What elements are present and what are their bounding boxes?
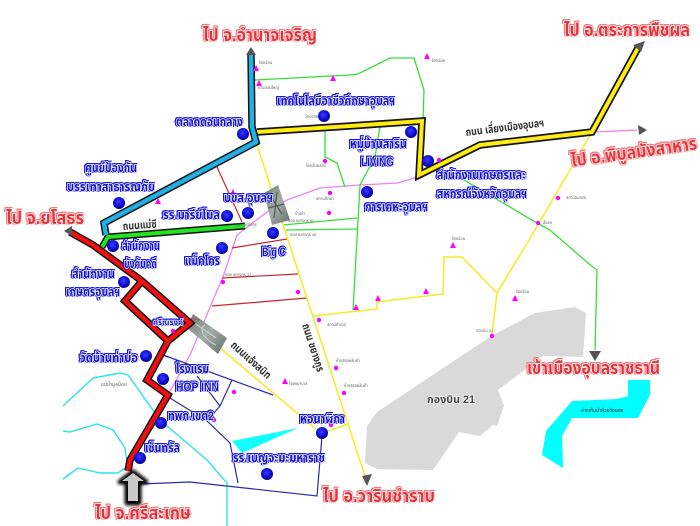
airbase area xyxy=(365,307,586,470)
red direction labels: ไป จ.ยโสธร xyxy=(6,208,84,228)
small place names: โรงพยาบาล xyxy=(289,381,307,386)
blue place labels: สำนักงาน xyxy=(122,239,160,253)
navy roads xyxy=(140,355,322,496)
blue place labels: เกษตรอุบลฯ xyxy=(66,285,120,299)
small place names: ซอย ชยางกูร xyxy=(236,222,257,227)
blue place labels: Big C xyxy=(262,245,286,259)
magenta triangle markers xyxy=(155,53,518,384)
blue place labels: หมู่บ้านสาริน xyxy=(350,137,407,152)
small place names: วิทยาลัย xyxy=(304,114,319,119)
black road names: ถนนแจ้งสนิท xyxy=(228,339,274,382)
black road names xyxy=(122,114,545,382)
small place names: ร้านค้า xyxy=(295,211,305,216)
blue place labels: สำนักงาน xyxy=(72,267,115,281)
arrow: start north from Sisaket xyxy=(120,472,146,503)
blue place labels: การเคหะอุบลฯ xyxy=(365,200,428,214)
red side roads xyxy=(212,167,307,306)
blue place labels: สำนักงานเกษตรและ xyxy=(437,168,526,182)
airbase label: กองบิน 21 xyxy=(427,394,475,406)
route: yellow bypass xyxy=(257,48,638,175)
small place names: กองบิน 21 xyxy=(476,328,494,333)
small place names: โรงเรียนสตรี xyxy=(306,163,326,168)
small place names: ห้างสรรพสินค้า xyxy=(344,383,368,388)
yellow thin roads xyxy=(220,132,592,476)
small place names: สถานีอนามัย xyxy=(566,195,587,200)
route: green Mae Si road xyxy=(102,226,245,247)
red direction labels: เข้าเมืองอุบลราชธานี xyxy=(527,358,660,379)
reservoir label: อ่างเก็บน้ำห้วยวังนอง xyxy=(581,406,624,414)
blue place labels xyxy=(66,94,527,465)
blue place labels: LIVING xyxy=(361,155,394,169)
small place names: สถานศึกษา xyxy=(316,196,334,201)
small place names: โรงเรียน xyxy=(516,289,530,294)
black road names: ถนนแม่ซี xyxy=(122,218,157,233)
blue place markers xyxy=(107,110,434,480)
blue place labels: เซ็นทรัล xyxy=(145,441,180,455)
blue place labels: ตลาดดอนกลาง xyxy=(176,115,243,129)
small place names: แม่น้ำมูลน้อย xyxy=(101,380,127,388)
satellite image: south junction xyxy=(187,314,227,354)
blue place labels: HOP INN xyxy=(176,380,219,394)
black road names: ถนน เลี่ยงเมืองอุบลฯ xyxy=(465,114,545,139)
rivers xyxy=(63,373,227,526)
small place names: บ้านดอนใหญ่ xyxy=(258,85,279,90)
red direction labels: ไป จ.อำนาจเจริญ xyxy=(203,25,317,45)
small place names xyxy=(101,58,587,388)
blue place labels: โรงแรม xyxy=(176,362,209,376)
arrow heads xyxy=(64,41,647,486)
small place names: โรงเรียน xyxy=(259,60,273,65)
blue place labels: บรรเทาสาธารณภัย xyxy=(67,180,155,194)
blue place labels: รร.มารีย์โมล xyxy=(163,208,220,222)
red direction labels: ไป จ.ศรีสะเกษ xyxy=(95,503,191,523)
black road names: ถนน ชยางกูร xyxy=(299,322,326,374)
blue place labels: ศรีณรงค์ xyxy=(153,317,183,327)
blue place labels: ทพภ.เขต2 xyxy=(168,409,214,423)
red direction labels: ไป อ.วารินชำราบ xyxy=(323,486,435,506)
blue place labels: สหกรณ์จังหวัดอุบลฯ xyxy=(437,187,527,201)
magenta dot markers xyxy=(171,158,560,427)
small place names: ซอย ชยางกูร 37 xyxy=(225,272,252,277)
blue place labels: เทคโนโลยีอาชีวศึกษาอุบลฯ xyxy=(277,94,395,108)
blue place labels: บังคับคดี xyxy=(124,257,157,271)
satellite image: Big C junction xyxy=(264,185,290,225)
small place names: ห้างสรรพสินค้า xyxy=(336,358,360,363)
small place names: สถานีตำรวจ xyxy=(327,322,346,327)
blue place labels: ศูนย์ป้องกัน xyxy=(85,161,137,176)
small place names: โรงเรียน xyxy=(432,58,446,63)
small place names: สี่แยก xyxy=(542,219,553,225)
small place names: โรงเรียน xyxy=(452,236,466,241)
blue place labels: รร.เบญจะมะมหาราช xyxy=(233,451,325,465)
small place names: ซอย ชยางกูร 42 xyxy=(288,218,315,223)
reservoir xyxy=(542,380,650,468)
blue place labels: แม็คโคร xyxy=(185,254,220,268)
green roads xyxy=(255,58,597,350)
blue place labels: บขส.อุบลฯ xyxy=(224,191,273,205)
pond xyxy=(232,428,298,453)
route: red road xyxy=(70,232,190,471)
small place names: ซอย ชยางกูร 40 xyxy=(290,232,317,237)
route: blue road xyxy=(104,55,256,235)
blue place labels: หอนาฬิกา xyxy=(300,412,345,426)
blue place labels: วัดบ้านท่าบ่อ xyxy=(80,351,138,365)
pink roads xyxy=(168,130,637,395)
